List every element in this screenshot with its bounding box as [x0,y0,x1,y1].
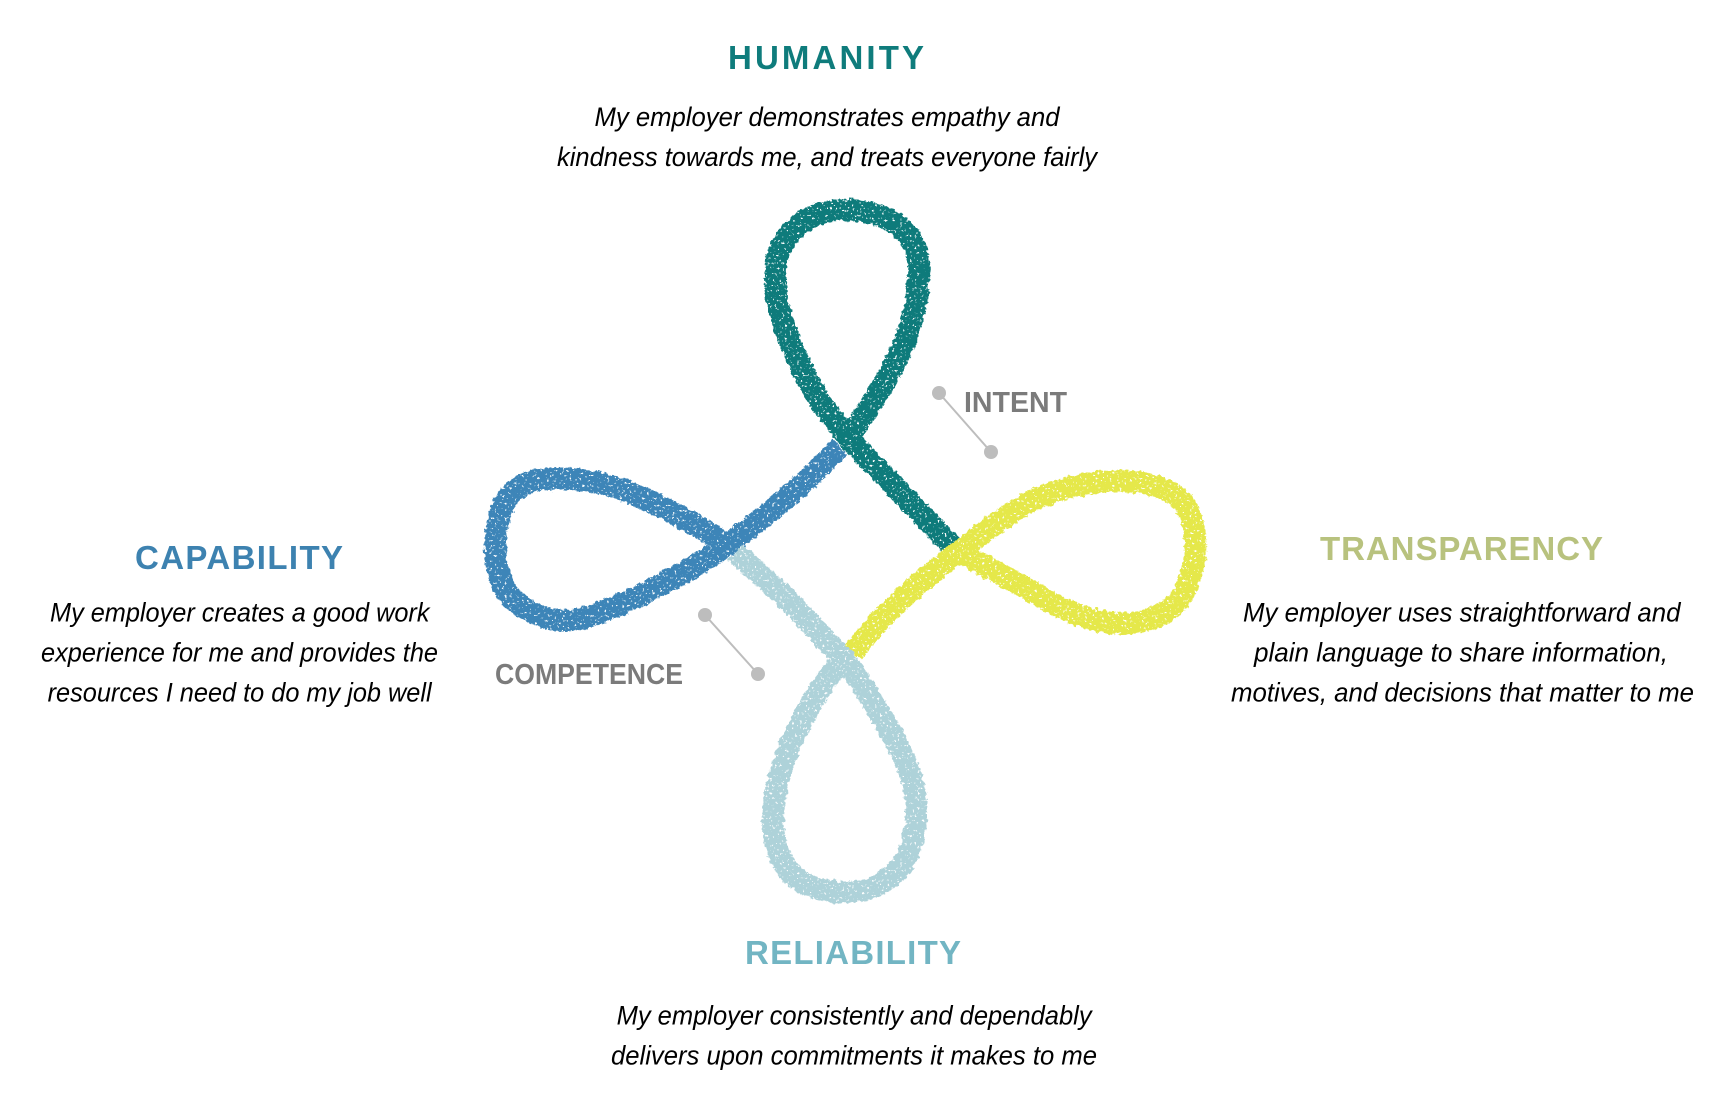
description: transparency: My employer uses straightforward and [1243,598,1681,628]
description: reliability [611,1000,1097,1070]
description: transparency: plain language to share information, [1253,638,1668,668]
callout: intent [932,386,1067,459]
description: transparency [1231,598,1694,708]
description: humanity [557,102,1098,172]
description: humanity: kindness towards me, and treats everyone fairly [557,142,1098,172]
description: reliability: delivers upon commitments it makes to me [611,1040,1097,1070]
description: humanity: My employer demonstrates empathy and [594,102,1060,132]
panel: transparency [1231,530,1694,708]
heading: transparency: TRANSPARENCY [1320,530,1603,567]
description: capability [41,598,438,708]
callout: competence: COMPETENCE [495,659,683,691]
panel: humanity [557,39,1098,172]
reliability loop (light blue) [735,552,916,892]
heading: humanity: HUMANITY [728,39,924,76]
description: reliability: My employer consistently and dependably [617,1000,1093,1030]
heading: capability: CAPABILITY [135,539,343,576]
callout: intent: INTENT [964,387,1067,419]
panel: reliability [611,934,1097,1070]
description: capability: experience for me and provides the [41,638,438,668]
description: capability: resources I need to do my job well [48,678,433,708]
humanity loop (teal) [775,210,952,546]
heading: reliability: RELIABILITY [745,934,961,971]
callout: competence [495,608,765,691]
transparency loop (yellow) [853,481,1195,653]
four-loop trust ribbon [495,210,1195,892]
description: capability: My employer creates a good work [50,598,431,628]
capability loop (blue) [495,447,840,620]
panel: capability [41,539,438,708]
description: transparency: motives, and decisions that matter to me [1231,678,1694,708]
